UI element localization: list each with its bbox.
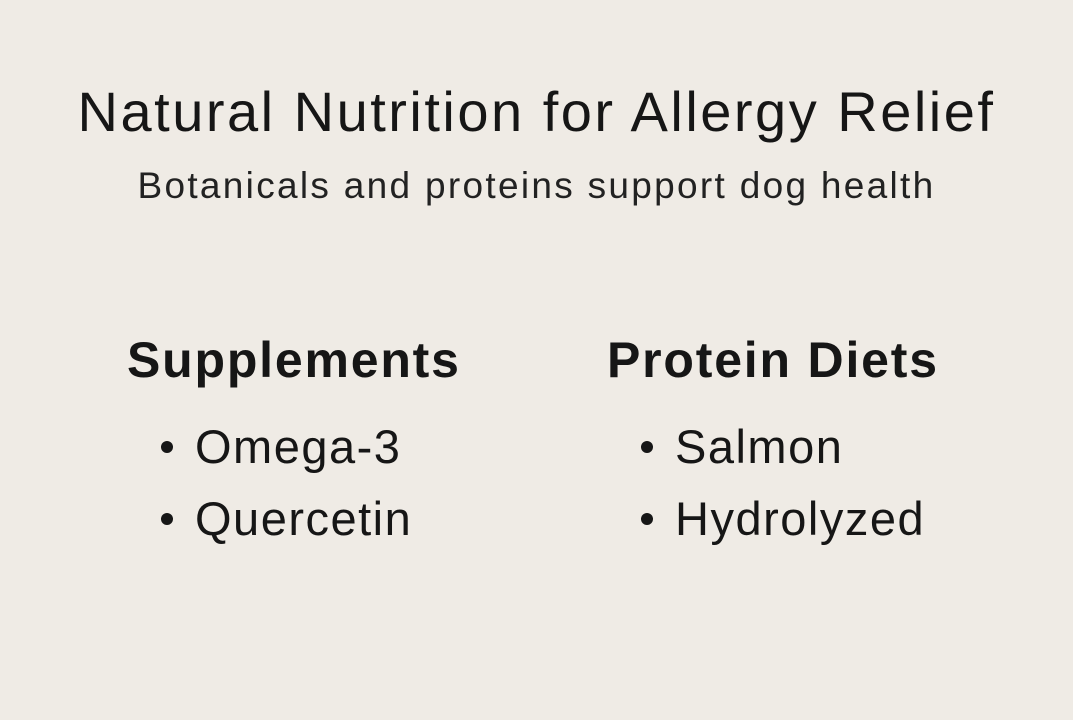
subtitle: Botanicals and proteins support dog health <box>137 165 936 206</box>
heading: supplements: Supplements <box>127 332 461 388</box>
list item: hydrolyzed: Hydrolyzed <box>675 492 925 545</box>
panel: supplements <box>127 332 461 545</box>
title: Natural Nutrition for Allergy Relief <box>78 80 995 143</box>
list item: salmon: Salmon <box>675 420 843 473</box>
list item: quercetin: Quercetin <box>195 492 412 545</box>
list item: omega-3: Omega-3 <box>195 420 401 473</box>
heading: protein diets: Protein Diets <box>607 332 939 388</box>
panel: protein diets <box>607 332 939 545</box>
